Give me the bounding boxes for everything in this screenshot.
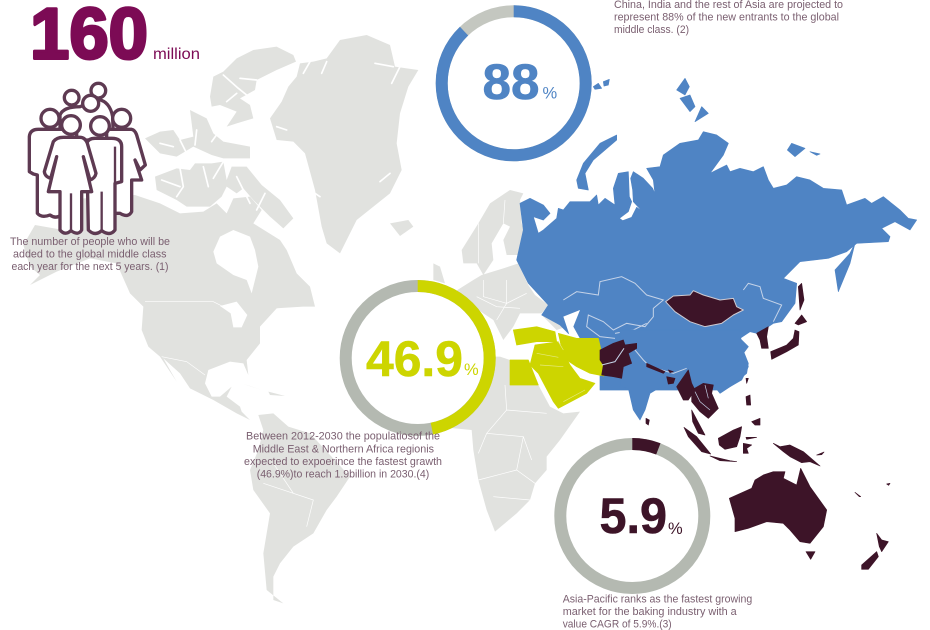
map: Central and East Asia in dark	[600, 283, 807, 378]
island: Sakhalin	[835, 243, 855, 292]
text: 46.9 percent description: Between 2012-2030 the populatiosof the	[246, 430, 440, 442]
text: 160 million description: The number of people who will be	[10, 236, 170, 248]
text: 160 million description	[10, 236, 170, 273]
map: Middle East in yellow	[510, 327, 604, 408]
icon: group of people	[29, 83, 145, 234]
text: 160 million description: each year for the next 5 years. (1)	[12, 261, 168, 273]
text: 5.9 percent description: value CAGR of 5.9%.(3)	[563, 618, 672, 630]
map: South-East Asia and Oceania in dark	[646, 363, 890, 569]
ring chart: 5.9 percent	[560, 444, 704, 588]
text: 88 percent description: represent 88% of the new entrants to the global	[614, 12, 839, 24]
ring chart: 5.9 percent: 5.9	[600, 488, 667, 544]
text: 46.9 percent description: (46.9%)to reach 1.9billion in 2030.(4)	[257, 469, 429, 481]
map: India and south China in blue	[620, 330, 748, 420]
ring chart: 46.9 percent: %	[464, 361, 479, 379]
ring chart: 88 percent	[442, 11, 586, 155]
text: 160 million description: added to the global middle class	[13, 248, 167, 260]
ring chart: 46.9 percent	[346, 286, 490, 430]
island: Novaya Zemlya	[577, 135, 617, 190]
map: Russia, Central Asia and China in blue	[517, 132, 917, 390]
text: 5.9 percent description: market for the baking industry with a	[563, 606, 738, 618]
ring chart: 88 percent: 88	[482, 54, 540, 110]
ring chart: 46.9 percent: 46.9	[366, 331, 463, 387]
text: 88 percent description: middle class. (2)	[614, 24, 689, 36]
ring chart: 5.9 percent: %	[668, 520, 683, 538]
text: 88 percent description	[614, 0, 843, 36]
map: Arctic islands in blue	[593, 78, 820, 157]
headline stat: 160 million: million	[153, 46, 200, 63]
text: 5.9 percent description	[563, 593, 752, 630]
ring chart: 88 percent: %	[542, 84, 558, 102]
map: Arctic Canada and Greenland	[145, 35, 418, 253]
map: Europe	[420, 190, 567, 347]
Central Asia and China borders	[563, 277, 782, 363]
map: South America and Africa	[250, 357, 580, 603]
text: 5.9 percent description: Asia-Pacific ranks as the fastest growing	[563, 593, 752, 605]
text: 46.9 percent description	[244, 430, 442, 481]
text: 46.9 percent description: expected to expoerince the fastest grawth	[244, 456, 442, 468]
text: 46.9 percent description: Middle East & Northern Africa regionis	[253, 443, 434, 455]
lake: Caspian Sea	[563, 310, 582, 342]
map: North America	[23, 195, 315, 420]
